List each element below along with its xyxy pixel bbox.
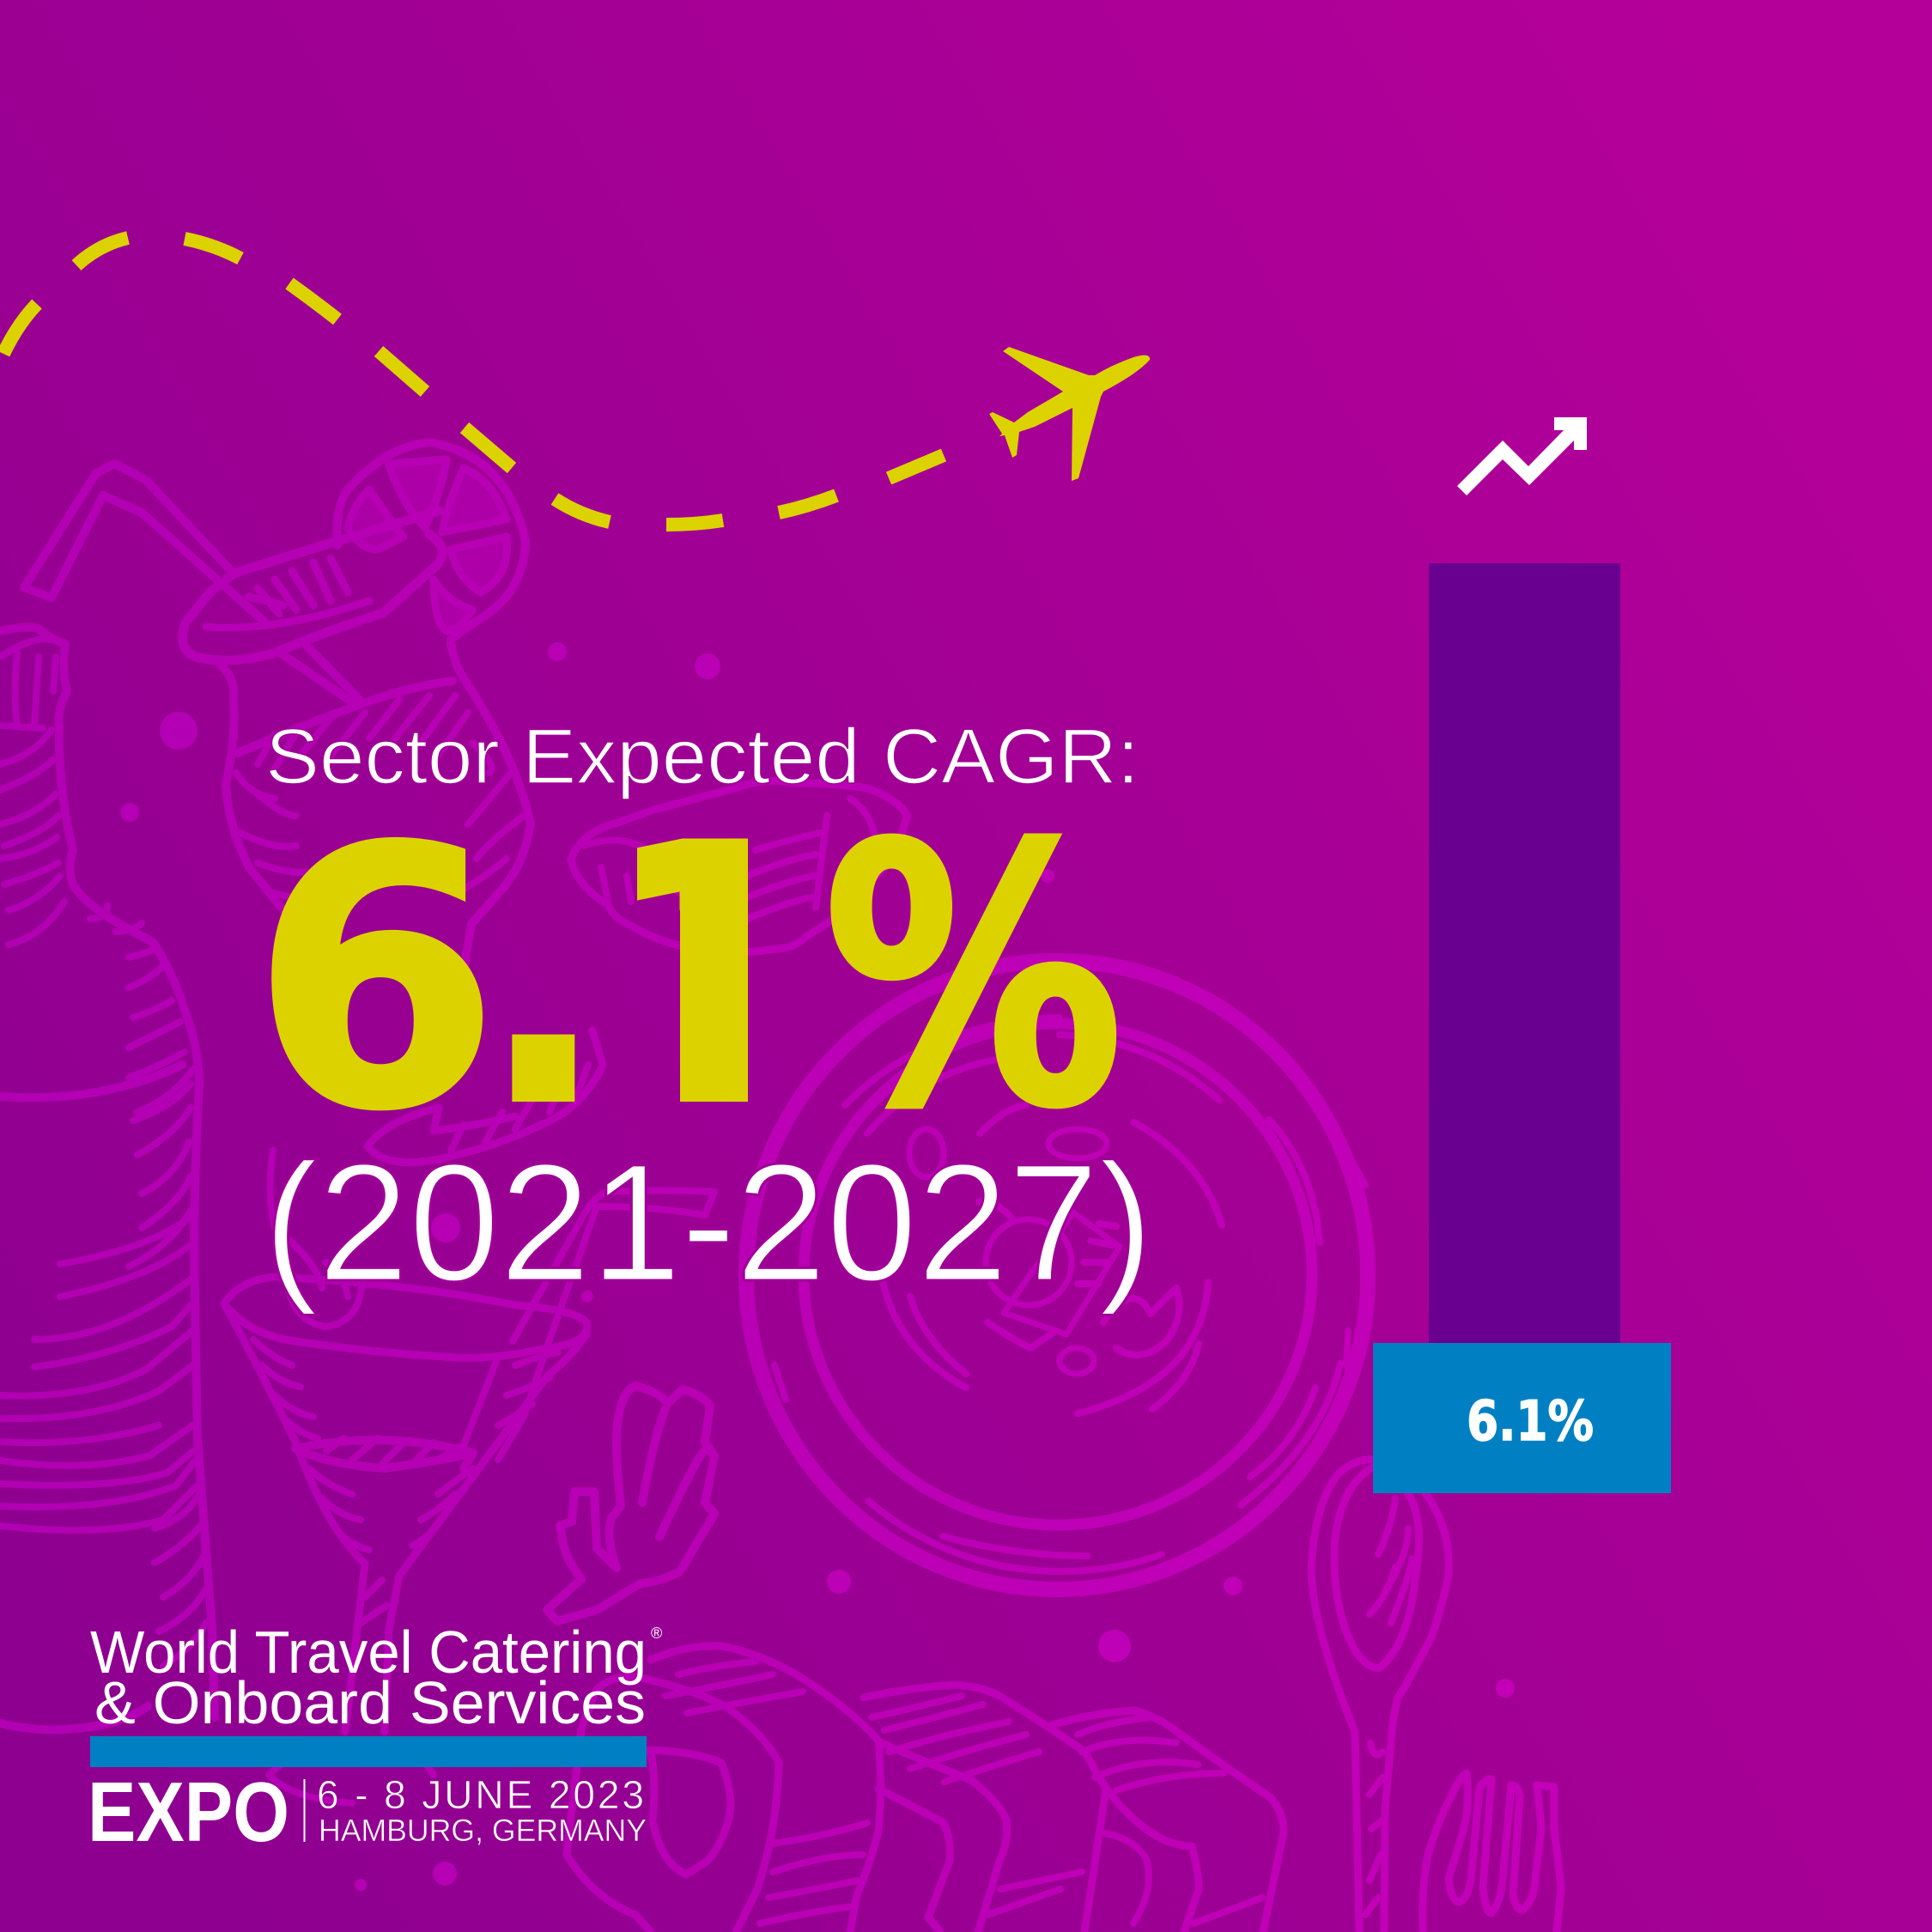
doodle: spoon xyxy=(1311,1460,1449,1932)
big number: 6.1%: . xyxy=(476,771,611,1186)
doodle: scattered dots xyxy=(120,642,1515,1891)
bar: value column xyxy=(1429,563,1620,1343)
logo: World Travel Catering & Onboard Services Expo xyxy=(88,1619,662,1859)
logo title line 1: World Travel Catering xyxy=(90,1619,647,1686)
event location: HAMBURG, GERMANY xyxy=(319,1813,647,1848)
doodle: pastry dish xyxy=(571,781,908,952)
doodle: cocktail with lemon slice xyxy=(24,442,531,970)
date range: (2021-2027) xyxy=(264,1129,1153,1316)
big number: 6.1%: 6 xyxy=(252,773,500,1188)
doodle: lower dish xyxy=(368,1030,603,1163)
doodle: sushi rolls xyxy=(567,1646,1284,1932)
bar chart xyxy=(1373,563,1671,1493)
big number: 6.1%: % xyxy=(823,771,1123,1186)
bar label box xyxy=(1373,1343,1671,1493)
bar value label: 6.1% xyxy=(1467,1390,1594,1454)
big number: 6.1%: 1 xyxy=(582,771,830,1186)
logo title line 2: & Onboard Services xyxy=(94,1669,646,1736)
logo blue band xyxy=(90,1736,647,1767)
background food doodles xyxy=(0,442,1561,1932)
doodle: fork xyxy=(1423,1773,1561,1932)
event date: 6 - 8 JUNE 2023 xyxy=(317,1772,644,1817)
flight path: dashed line xyxy=(3,238,944,525)
doodle: plate with garnish xyxy=(746,961,1368,1589)
doodle: martini glass xyxy=(224,1151,714,1803)
big number: 6.1% xyxy=(271,833,1116,1111)
heading: sector expected CAGR: Sector Expected CAGR: xyxy=(265,714,1139,800)
doodle: herb leaf xyxy=(547,1386,714,1621)
registered mark: ® xyxy=(651,1625,662,1642)
icon: trend arrow xyxy=(1457,417,1587,495)
icon: airplane xyxy=(989,347,1150,481)
logo divider xyxy=(304,1779,306,1842)
doodle: bottle xyxy=(0,628,215,1730)
logo EXPO wordmark: EXPO xyxy=(88,1765,289,1859)
